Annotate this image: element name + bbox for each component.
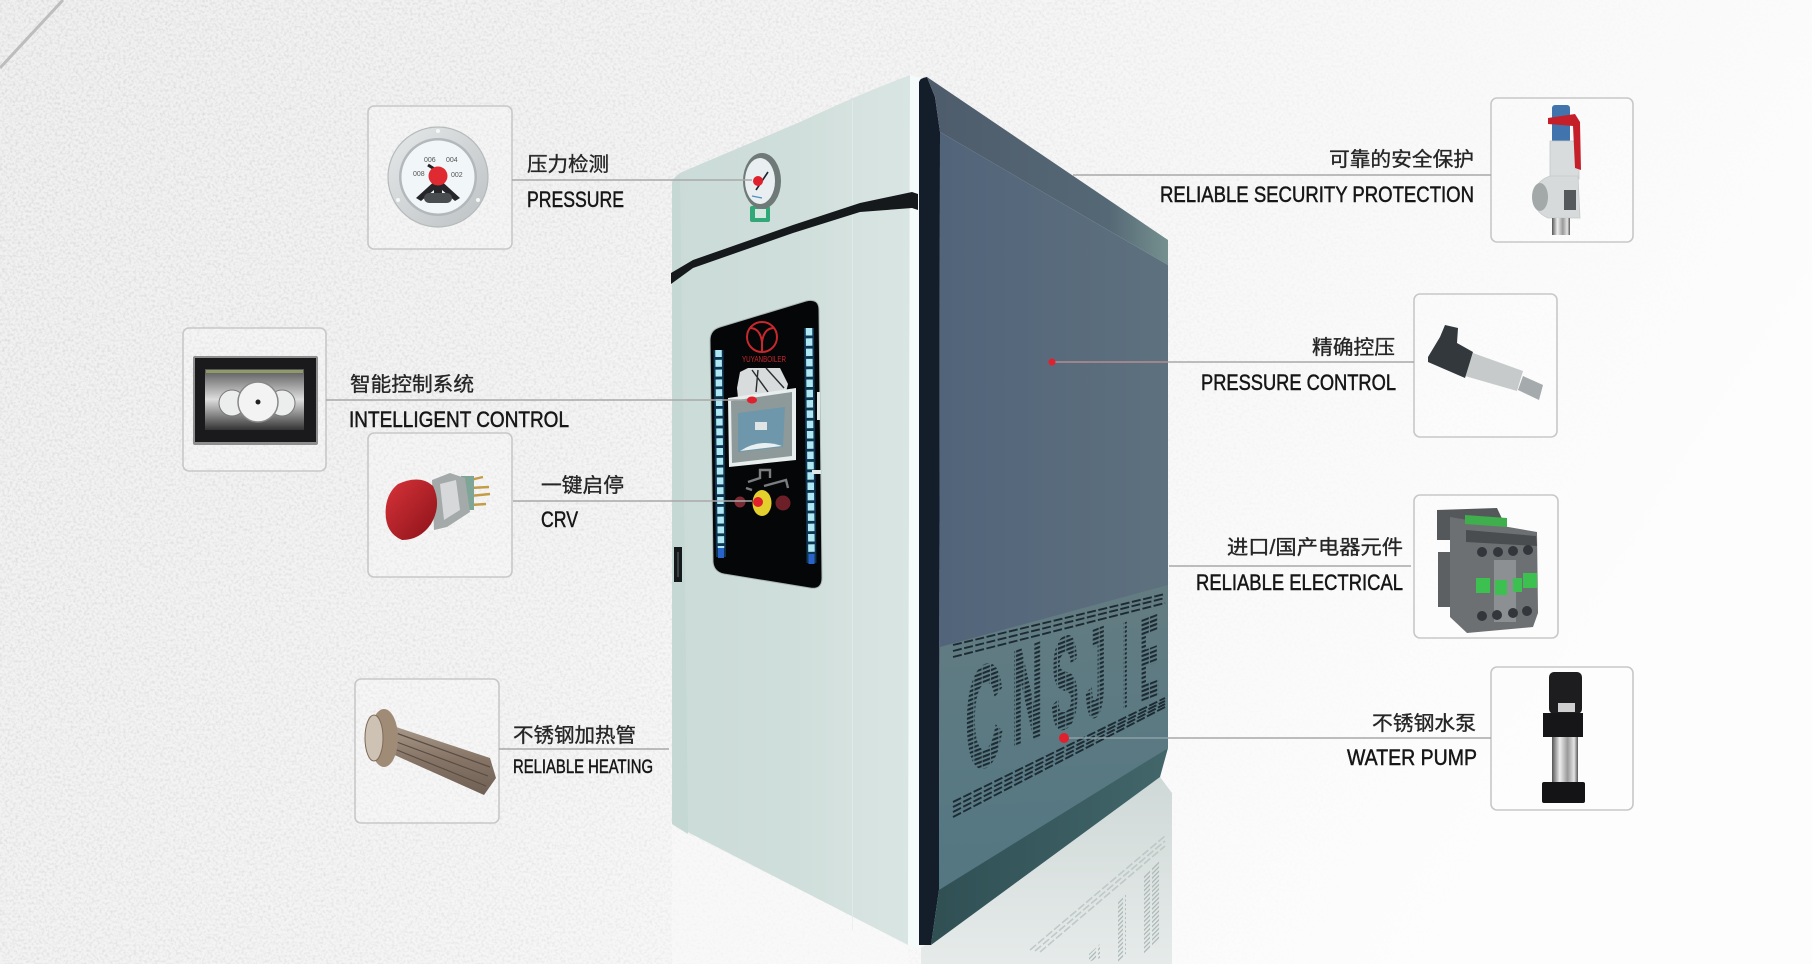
- card: emergency button photo: [368, 433, 512, 577]
- side panel: [927, 77, 1168, 945]
- callout: intelligent control: [183, 328, 757, 471]
- label: security protection: 可靠的安全保护: [1329, 148, 1474, 171]
- callout: safety valve: [1073, 98, 1633, 242]
- callout: heating tube: [355, 679, 669, 823]
- front face: [672, 75, 921, 950]
- pressure gauge on cabinet: [743, 153, 781, 222]
- boiler reflection on floor: [672, 777, 1172, 964]
- callout: pressure control: [1048, 294, 1557, 437]
- label: CRV: 一键启停: [541, 474, 624, 497]
- white cloth detail: [737, 368, 788, 398]
- side panel perforated logo CNSJIE: C: [966, 634, 1002, 799]
- label: water pump: [1347, 712, 1477, 770]
- label: electrical: RELIABLE ELECTRICAL: [1196, 570, 1403, 595]
- touch screen: [728, 388, 796, 467]
- callout: water pump: [1059, 667, 1633, 810]
- side panel perforated logo CNSJIE: J: [1087, 605, 1105, 740]
- label: heating: RELIABLE HEATING: [513, 757, 653, 778]
- black band across front: [671, 192, 918, 284]
- label: CRV: [541, 474, 624, 532]
- side panel perforated logo CNSJIE: I: [1123, 603, 1128, 730]
- card: heating tube photo: [355, 679, 499, 823]
- label: pressure control: [1201, 336, 1396, 395]
- card: gauge photo: 002: [451, 172, 463, 179]
- label: electrical: [1196, 536, 1403, 595]
- callout: one-key start/stop: [368, 433, 763, 577]
- label: pressure: [527, 153, 624, 212]
- card: gauge photo: 004: [446, 157, 458, 164]
- label: electrical: 进口/国产电器元件: [1227, 536, 1403, 559]
- LED strips: [718, 328, 812, 564]
- dark side corner strip: [919, 77, 940, 945]
- card: safety valve photo: [1491, 98, 1633, 242]
- label: heating: [513, 724, 653, 778]
- side panel perforated logo CNSJIE: S: [1052, 612, 1078, 755]
- boiler cabinet: [671, 75, 1168, 950]
- buttons: [734, 490, 790, 516]
- label: water pump: WATER PUMP: [1347, 745, 1477, 770]
- label: pressure control: 精确控压: [1312, 336, 1395, 359]
- background: textured wall: [0, 0, 1294, 964]
- callout: electrical: [1169, 495, 1558, 638]
- label: water pump: 不锈钢水泵: [1372, 712, 1476, 735]
- side panel perforated logo CNSJIE: E: [1140, 596, 1158, 722]
- card: water pump photo: [1491, 667, 1633, 810]
- door handle slot: [674, 547, 682, 582]
- label: intelligent control: [349, 373, 569, 432]
- label: CRV: CRV: [541, 507, 578, 532]
- side tabs: [812, 392, 821, 474]
- brand logo: [742, 322, 786, 364]
- label: pressure: 压力检测: [527, 153, 609, 176]
- brand logo: YUYANBOILER: [742, 355, 786, 364]
- side panel perforated logo CNSJIE: N: [1012, 616, 1043, 773]
- card: contactor photo: [1414, 495, 1558, 638]
- card: gauge photo: 006: [424, 157, 436, 164]
- label: pressure: PRESSURE: [527, 187, 624, 212]
- label: intelligent control: 智能控制系统: [350, 373, 474, 396]
- control window: [710, 300, 822, 588]
- callout: pressure gauge: [368, 106, 763, 249]
- label: pressure control: PRESSURE CONTROL: [1201, 370, 1396, 395]
- card: pressure transmitter photo: [1414, 294, 1557, 437]
- side panel vents: [953, 594, 1165, 817]
- card: touch panel photo: [183, 328, 326, 471]
- label: heating: 不锈钢加热管: [513, 724, 636, 747]
- label: security protection: [1160, 148, 1474, 207]
- side panel perforated logo CNSJIE: [966, 572, 1158, 799]
- label: security protection: RELIABLE SECURITY PROTECTION: [1160, 182, 1474, 207]
- card: gauge photo: 008: [413, 171, 425, 178]
- card: gauge photo: [368, 106, 512, 249]
- mechanical parts below screen: [746, 470, 788, 490]
- label: intelligent control: INTELLIGENT CONTROL: [349, 407, 569, 432]
